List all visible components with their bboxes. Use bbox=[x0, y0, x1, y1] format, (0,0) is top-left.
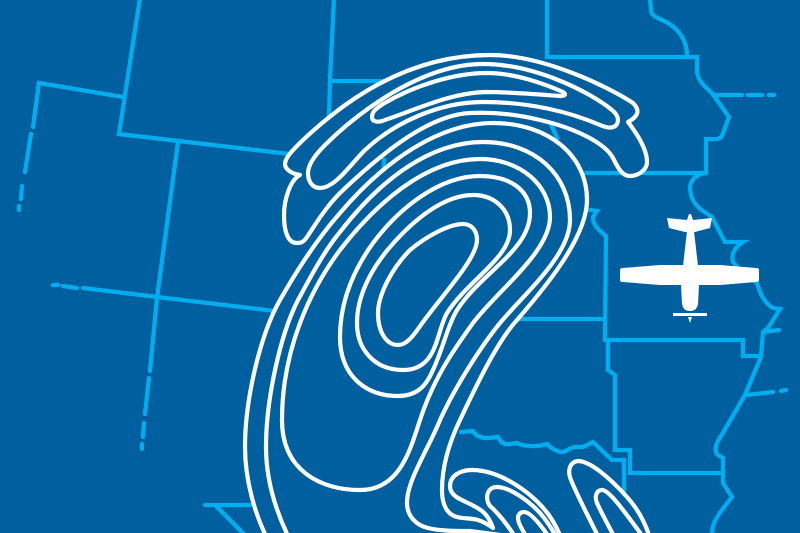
airplane fuselage bbox=[681, 231, 699, 311]
west borders bbox=[119, 0, 290, 154]
Kansas-Missouri cross border bbox=[520, 317, 605, 321]
contour: middle crescent bbox=[308, 64, 618, 188]
lower river border bbox=[712, 328, 768, 533]
Arkansas western border bbox=[608, 342, 722, 473]
dashed eastern extension bbox=[713, 93, 774, 97]
contour lines bbox=[245, 55, 650, 533]
contour: southern lobe inner bbox=[487, 487, 557, 533]
eastern stub line bbox=[763, 330, 779, 332]
contour: southeast lobe outer bbox=[569, 461, 650, 533]
southwest corner border bbox=[205, 505, 250, 533]
Missouri western border bbox=[590, 210, 761, 356]
north central borders bbox=[329, 0, 385, 118]
contour: third closed loop bbox=[282, 159, 550, 490]
airplane wings bbox=[620, 265, 759, 285]
contour: southern lobe core bbox=[518, 512, 549, 533]
northern Iowa region border bbox=[547, 0, 729, 173]
eastern dashed stub bbox=[746, 390, 786, 395]
contour: innermost closed loop bbox=[378, 224, 477, 345]
icon: airplane seen from above bbox=[620, 214, 759, 323]
central vertical border bbox=[142, 142, 178, 449]
airplane tailplane bbox=[667, 214, 712, 232]
central horizontal dashed border bbox=[53, 285, 275, 311]
contour: second band bbox=[266, 142, 570, 533]
contour: fifth closed loop bbox=[357, 195, 510, 370]
contour: southeast lobe inner bbox=[596, 490, 644, 533]
contour: main outer band bbox=[245, 123, 587, 533]
contour: fourth closed loop bbox=[340, 176, 530, 396]
Red River wavy border bbox=[461, 431, 624, 500]
Mississippi river border bbox=[690, 173, 780, 328]
hidden border fragments bbox=[384, 120, 558, 172]
contour: outer northern crescent bbox=[284, 55, 647, 243]
upper river border bbox=[650, 0, 687, 55]
northwest dashed border bbox=[19, 83, 123, 210]
airplane propeller bbox=[673, 313, 707, 316]
airplane spinner bbox=[688, 317, 692, 323]
contour: inner crescent bbox=[372, 73, 565, 122]
